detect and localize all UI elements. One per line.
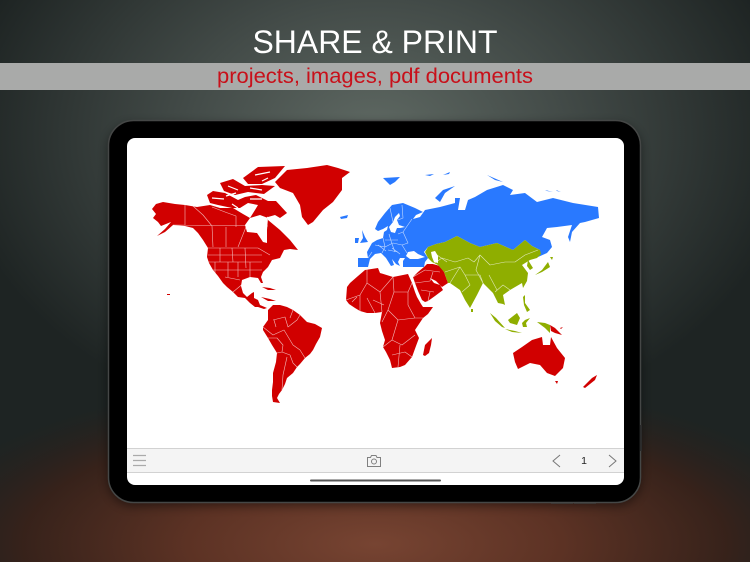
map region: country borders — [173, 172, 538, 390]
subtitle: projects, images, pdf documents — [217, 65, 533, 88]
home indicator — [310, 480, 441, 482]
title: SHARE & PRINT — [252, 24, 498, 60]
map region: Americas, Africa, Middle East and Oceania in red — [152, 165, 597, 403]
map region: Asia in green — [425, 236, 553, 333]
bottom toolbar — [127, 448, 624, 472]
map region: Europe and Russia in blue — [340, 172, 599, 267]
world map — [152, 165, 599, 403]
tablet device — [108, 120, 642, 506]
tablet screen — [127, 138, 624, 485]
icon: menu — [133, 456, 146, 466]
page number: 1 — [581, 455, 587, 467]
icon: previous page — [553, 455, 560, 467]
icon: camera — [368, 456, 380, 466]
icon: next page — [609, 455, 616, 467]
subtitle band — [0, 63, 750, 90]
